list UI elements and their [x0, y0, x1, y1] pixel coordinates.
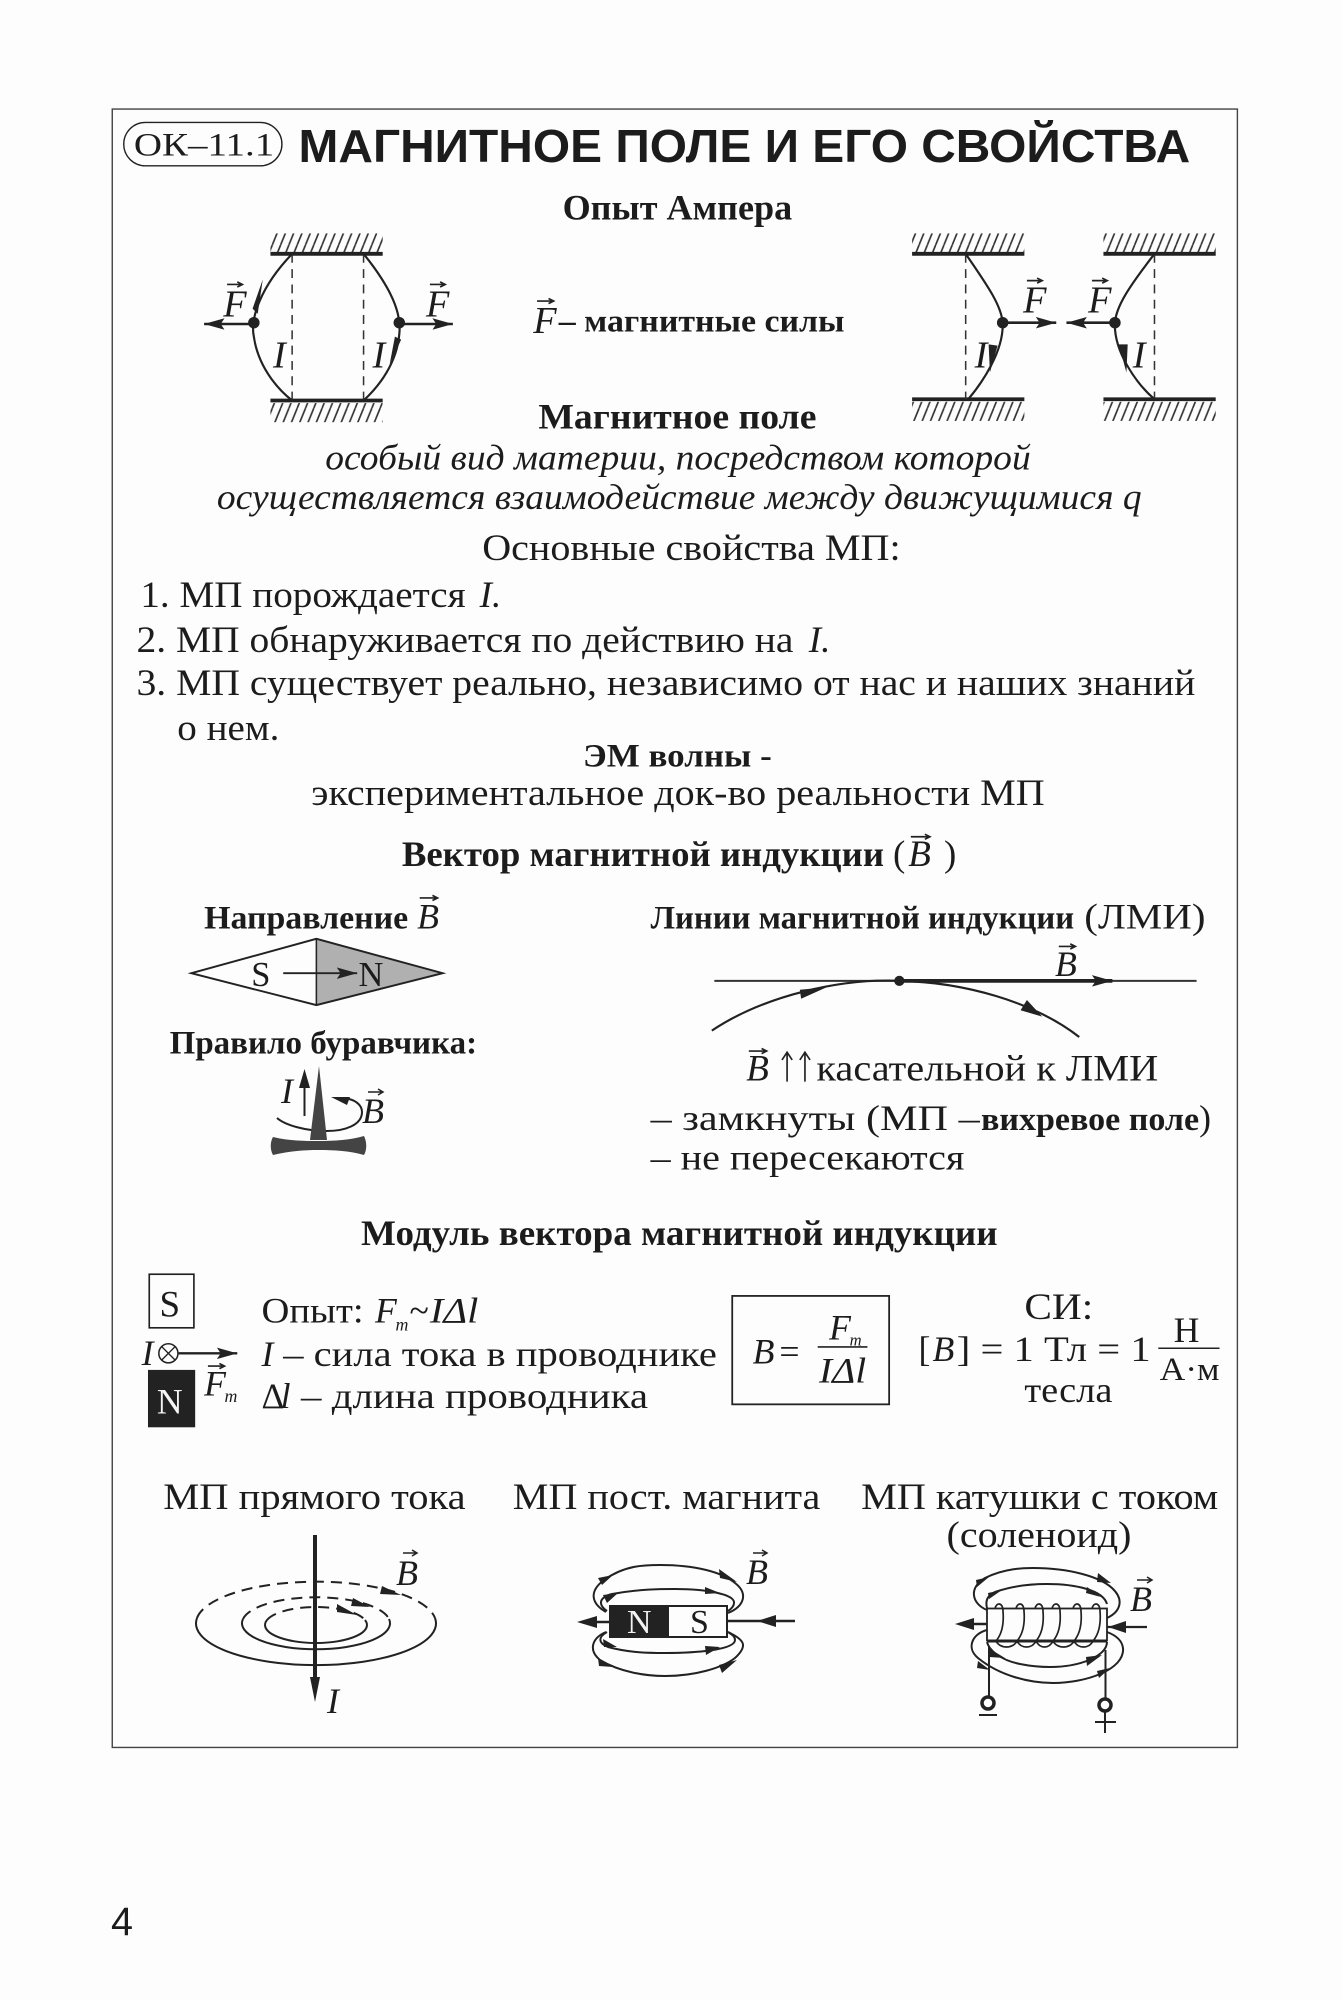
- diagram: repelling conductors: I: [272, 334, 288, 376]
- heading: induction vector: (: [893, 834, 905, 875]
- heading: solenoid field: (соленоид): [947, 1515, 1132, 1556]
- text block: field definition: осуществляется взаимодействие между движущимися q: [217, 477, 1142, 517]
- diagram: repelling conductors: [204, 233, 453, 422]
- text block: SI unit: Н: [1174, 1310, 1199, 1350]
- text block: EM waves: экспериментальное док-во реальности МП: [311, 773, 1045, 814]
- text block: experiment description: – длина проводника: [300, 1376, 648, 1416]
- list: field properties: I.: [479, 575, 501, 616]
- text block: experiment description: m: [395, 1314, 408, 1334]
- badge: OK-11.1: ОК–11.1: [134, 127, 274, 164]
- diagram: induction line with tangent: [712, 944, 1197, 1037]
- diagram: field of permanent magnet: S: [690, 1604, 709, 1641]
- text block: SI unit: СИ:: [1024, 1287, 1093, 1328]
- text block: EM waves: [311, 738, 1045, 814]
- diagram: solenoid field: [955, 1568, 1152, 1733]
- text block: SI unit: ] = 1 Тл = 1: [957, 1329, 1151, 1369]
- text block: line properties: [649, 1098, 1211, 1178]
- text block: SI unit: [: [918, 1329, 930, 1369]
- heading: magnetic field: Магнитное поле: [538, 397, 816, 437]
- diagram: attracting conductors: I: [1132, 334, 1148, 376]
- panel: main frame: [112, 109, 1237, 1747]
- icon: compass needle: S: [251, 956, 270, 994]
- heading: induction lines: Линии магнитной индукции: [651, 900, 1074, 937]
- list: field properties: 2. МП обнаруживается по действию на: [136, 620, 793, 661]
- list: field properties: о нем.: [177, 708, 279, 749]
- text block: SI unit: B: [933, 1329, 955, 1369]
- heading: solenoid field: МП катушки с током: [861, 1477, 1218, 1518]
- text block: experiment description: Δ: [262, 1376, 284, 1416]
- heading: direction of B: B: [417, 897, 439, 937]
- label: F magnetic forces: F: [532, 300, 557, 342]
- diagram: attracting conductors: F: [1087, 280, 1112, 321]
- text block: line properties: вихревое поле: [981, 1101, 1199, 1138]
- diagram: conductor between poles: N: [157, 1381, 183, 1421]
- diagram: attracting conductors: [912, 233, 1216, 421]
- heading: gimlet rule: Правило буравчика:: [170, 1025, 477, 1062]
- diagram: field of permanent magnet: [577, 1550, 795, 1676]
- icon: gimlet: I: [280, 1071, 295, 1111]
- icon: gimlet: B: [362, 1091, 384, 1131]
- text block: experiment description: [261, 1291, 717, 1416]
- text block: SI unit: А·м: [1160, 1351, 1220, 1388]
- diagram: conductor between poles: F: [203, 1363, 227, 1403]
- list: field properties: 1. МП порождается: [140, 575, 466, 616]
- text block: experiment description: I: [261, 1334, 276, 1374]
- text block: experiment description: – сила тока в проводнике: [282, 1334, 717, 1374]
- text block: B along tangent: касательной к ЛМИ: [816, 1048, 1158, 1089]
- heading: induction vector: Вектор магнитной индукции: [402, 834, 884, 874]
- heading: induction vector: B: [908, 834, 931, 875]
- diagram: conductor between poles: I: [141, 1333, 156, 1373]
- badge: OK-11.1: [124, 122, 282, 166]
- diagram: field of straight current: I: [326, 1681, 341, 1721]
- diagram: conductor between poles: m: [225, 1386, 238, 1406]
- label: F magnetic forces: [532, 298, 845, 342]
- diagram: repelling conductors: F: [425, 283, 450, 325]
- heading: straight current field: МП прямого тока: [163, 1477, 466, 1518]
- diagram: field of straight current: B: [396, 1553, 418, 1593]
- diagram: solenoid field: B: [1130, 1579, 1152, 1619]
- formula box: B = Fm / I dl: m: [850, 1331, 862, 1350]
- heading: solenoid field: [861, 1477, 1218, 1556]
- text block: line properties: – не пересекаются: [649, 1138, 964, 1178]
- text block: SI unit: [918, 1287, 1220, 1410]
- text block: experiment description: F: [374, 1291, 398, 1331]
- heading: Ampere experiment: Опыт Ампера: [563, 187, 792, 227]
- heading: induction vector: ): [944, 834, 956, 875]
- formula box: B = Fm / I dl: B: [753, 1332, 775, 1372]
- text block: SI unit: тесла: [1024, 1370, 1113, 1410]
- text block: field definition: [217, 437, 1142, 517]
- heading: direction of B: Направление: [204, 900, 408, 937]
- text block: experiment description: IΔl: [429, 1291, 478, 1331]
- heading: induction modulus: Модуль вектора магнитной индукции: [361, 1213, 998, 1253]
- diagram: induction line with tangent: B: [1055, 944, 1077, 984]
- list: field properties: [136, 575, 1195, 749]
- list: field properties: 3. МП существует реально, независимо от нас и наших знаний: [136, 663, 1195, 704]
- text block: B along tangent: B: [746, 1048, 769, 1089]
- icon: compass needle: N: [358, 956, 383, 994]
- formula box: B = Fm / I dl: =: [779, 1332, 800, 1372]
- text block: field definition: особый вид материи, посредством которой: [325, 437, 1031, 477]
- heading: main properties: Основные свойства МП:: [482, 528, 901, 569]
- list: field properties: I.: [808, 620, 830, 661]
- diagram: repelling conductors: I: [371, 334, 387, 376]
- text block: experiment description: Опыт:: [262, 1291, 364, 1331]
- label: F magnetic forces: – магнитные силы: [558, 304, 845, 339]
- text block: line properties: ): [1199, 1098, 1211, 1138]
- diagram: conductor between poles: S: [159, 1284, 180, 1325]
- diagram: field of permanent magnet: N: [627, 1604, 652, 1641]
- diagram: attracting conductors: I: [974, 334, 990, 376]
- diagram: attracting conductors: F: [1022, 280, 1047, 321]
- diagram: field of permanent magnet: B: [746, 1552, 768, 1592]
- heading: induction lines: (ЛМИ): [1084, 897, 1206, 937]
- text block: line properties: – замкнуты (МП –: [649, 1098, 981, 1138]
- text block: EM waves: ЭМ волны -: [583, 738, 772, 775]
- icon: compass needle: [191, 939, 443, 1005]
- page number: 4: [111, 1900, 133, 1944]
- heading: permanent magnet field: МП пост. магнита: [513, 1477, 820, 1518]
- text block: experiment description: ~: [409, 1291, 429, 1331]
- title: МАГНИТНОЕ ПОЛЕ И ЕГО СВОЙСТВА: [299, 120, 1190, 172]
- diagram: conductor between poles: [141, 1274, 238, 1427]
- formula box: B = Fm / I dl: IΔl: [818, 1351, 866, 1391]
- icon: gimlet: [271, 1066, 384, 1155]
- diagram: field of straight current: [196, 1535, 436, 1721]
- diagram: repelling conductors: F: [222, 283, 247, 325]
- formula box: B = Fm / I dl: F: [828, 1307, 852, 1347]
- text block: experiment description: l: [281, 1376, 291, 1416]
- formula box: B = Fm / I dl: [732, 1296, 889, 1404]
